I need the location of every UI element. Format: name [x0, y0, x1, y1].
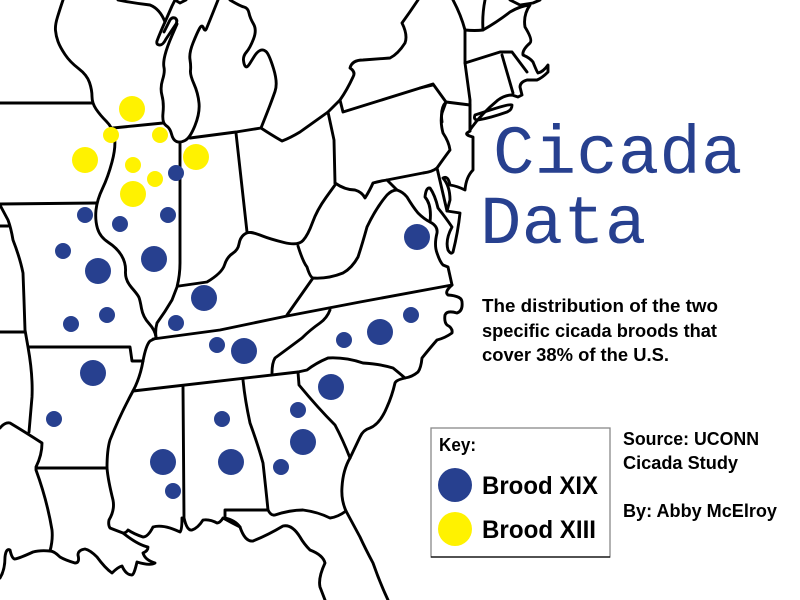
- source and byline: By: Abby McElroy: [623, 501, 777, 521]
- legend key: Key:: [439, 435, 476, 455]
- description text: cover 38% of the U.S.: [482, 345, 669, 365]
- source and byline: [623, 429, 777, 521]
- source and byline: Source: UCONN: [623, 429, 759, 449]
- title: Data: [480, 186, 646, 264]
- legend key: Brood XIII: [482, 516, 596, 544]
- title: [480, 116, 743, 264]
- map: eastern US state outlines: [0, 0, 548, 600]
- legend key: [431, 428, 610, 557]
- description text: The distribution of the two: [482, 296, 718, 316]
- legend key: Brood XIX: [482, 472, 598, 500]
- source and byline: Cicada Study: [623, 453, 738, 473]
- description text: specific cicada broods that: [482, 321, 717, 341]
- title: Cicada: [493, 116, 743, 194]
- Brood XIX dots (blue): [46, 165, 430, 499]
- description text: [482, 296, 718, 365]
- Brood XIII dots (yellow): [72, 96, 209, 207]
